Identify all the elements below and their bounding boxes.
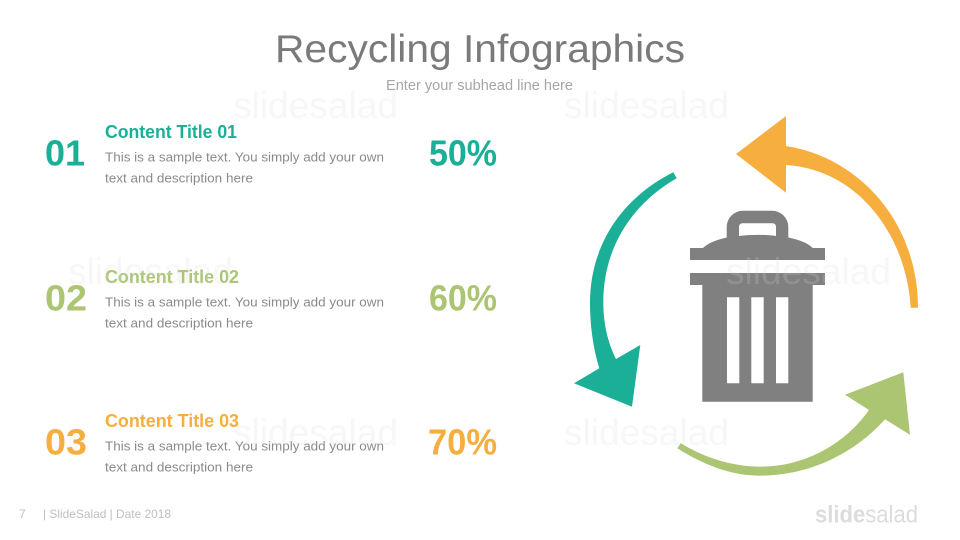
row 2: content item (45, 266, 497, 330)
watermarks: slidesalad (68, 251, 233, 292)
arrow: teal (574, 172, 677, 407)
description 03: This is a sample text. You simply add your own (105, 438, 384, 454)
footer text: | SlideSalad | Date 2018 (43, 507, 171, 521)
description 03: text and description here (105, 460, 253, 474)
number 02: 02 (45, 278, 87, 318)
description 01: text and description here (105, 170, 253, 186)
content title 03: Content Title 03 (105, 410, 239, 431)
description 01: This is a sample text. You simply add your own (105, 150, 384, 164)
watermarks (68, 85, 891, 453)
row 3: content item (45, 410, 497, 474)
description 01 (105, 150, 384, 186)
description 02 (105, 294, 384, 330)
percentage 70: 70% (428, 422, 497, 462)
percentage 50: 50% (429, 132, 497, 174)
watermarks: slidesalad (233, 412, 398, 453)
watermarks: slidesalad (564, 85, 729, 126)
subhead: Enter your subhead line here (386, 78, 573, 94)
number 01: 01 (45, 132, 85, 174)
description 02: text and description here (105, 316, 253, 330)
row 1: content item (45, 121, 497, 186)
watermarks: slidesalad (726, 251, 891, 292)
watermarks: slidesalad (233, 85, 398, 126)
content title 01: Content Title 01 (105, 121, 237, 142)
trash body (690, 273, 825, 402)
footer logo: slidesalad (815, 502, 918, 528)
title: Recycling Infographics (275, 28, 685, 71)
number 03: 03 (45, 422, 87, 462)
arrow: orange (736, 116, 918, 308)
trash lid (690, 211, 825, 260)
percentage 60: 60% (429, 278, 497, 318)
arrow: green (677, 372, 910, 476)
icon: trash can (690, 211, 825, 402)
description 02: This is a sample text. You simply add your own (105, 294, 384, 310)
description 03 (105, 438, 384, 474)
content title 02: Content Title 02 (105, 266, 239, 287)
footer page number: 7 (19, 507, 26, 521)
watermarks: slidesalad (564, 412, 729, 453)
